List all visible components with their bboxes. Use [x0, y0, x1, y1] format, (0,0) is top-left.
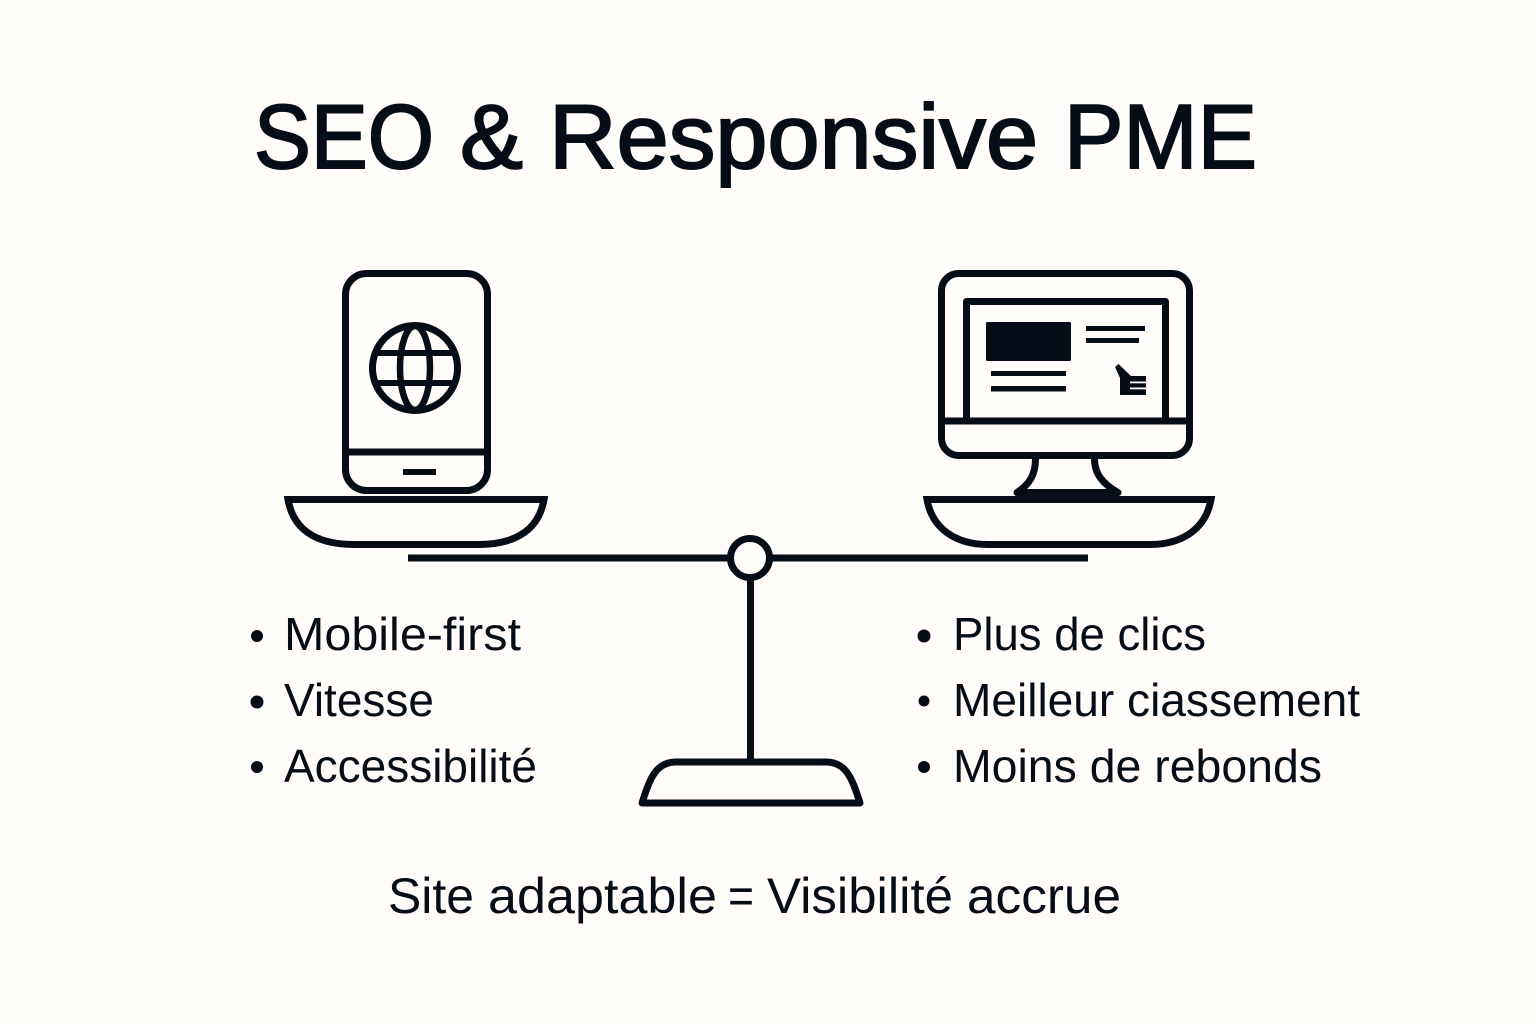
screen content block	[986, 322, 1071, 361]
monitor stand	[1017, 459, 1118, 492]
left list: criteria	[250, 608, 537, 792]
conclusion text	[388, 868, 1121, 924]
right scale pan	[927, 500, 1211, 544]
icon: globe	[372, 326, 458, 410]
conclusion text: Site	[388, 868, 474, 924]
conclusion text: =	[728, 868, 754, 924]
left list: criteria: Accessibilité	[284, 740, 537, 792]
icon: pointing hand cursor	[1115, 364, 1146, 395]
title: PME	[1064, 87, 1257, 188]
title	[254, 87, 1257, 188]
right list: benefits: Moins de rebonds	[953, 740, 1322, 792]
title: &	[460, 87, 523, 188]
left scale pan	[288, 500, 544, 544]
icon: desktop monitor on right pan	[942, 274, 1190, 492]
screen text lines	[991, 326, 1145, 392]
title: SEO	[254, 87, 434, 188]
right list: benefits: Meilleur ciassement	[953, 674, 1360, 726]
scale beam	[408, 554, 1088, 562]
right list: benefits: Plus de clics	[953, 608, 1206, 660]
left list: criteria: Mobile-first	[284, 608, 521, 660]
right list: benefits	[918, 608, 1360, 792]
conclusion text: adaptable	[488, 868, 717, 924]
scale stem	[747, 578, 754, 762]
scale base	[642, 762, 860, 803]
left list: criteria: Vitesse	[284, 674, 434, 726]
title: Responsive	[549, 87, 1038, 188]
scale pivot	[730, 538, 770, 578]
conclusion text: Visibilité	[767, 868, 953, 924]
icon: smartphone with globe on left pan	[345, 274, 488, 490]
conclusion text: accrue	[967, 868, 1121, 924]
